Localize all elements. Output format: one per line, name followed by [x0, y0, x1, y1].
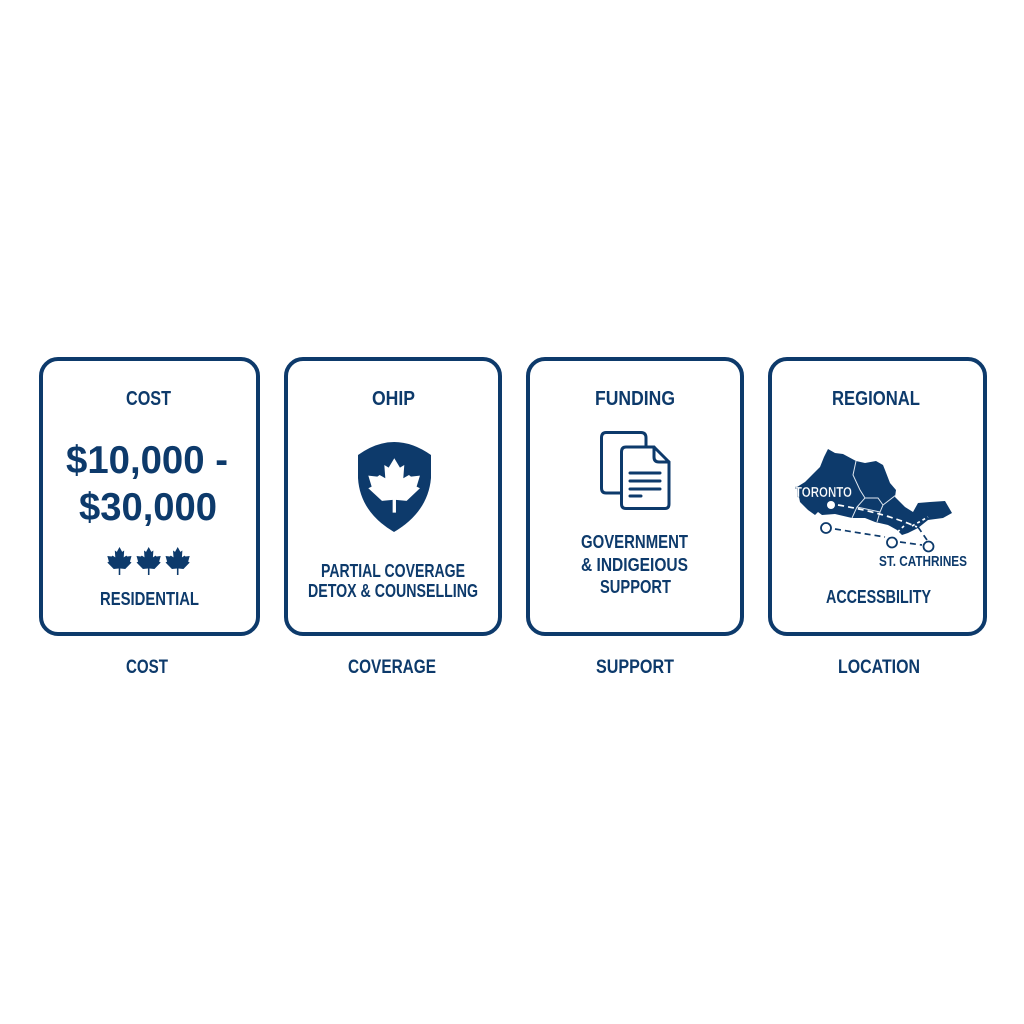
text: coverage description: DETOX & COUNSELLING — [308, 581, 478, 601]
card frame: funding — [528, 359, 742, 634]
price range: $30,000 — [79, 486, 217, 529]
text: support description: SUPPORT — [600, 577, 671, 597]
label: St. Cathrines: ST. CATHRINES — [879, 553, 967, 570]
heading: cost: COST — [126, 388, 171, 410]
label: residential: RESIDENTIAL — [100, 589, 199, 609]
text: support description: & INDIGEIOUS — [581, 555, 688, 575]
heading: funding: FUNDING — [595, 388, 675, 410]
map: southern Ontario — [797, 449, 952, 552]
icon: shield with maple leaf — [358, 442, 431, 532]
label: accessibility: ACCESSBILITY — [826, 587, 931, 607]
caption: support: SUPPORT — [596, 657, 674, 678]
card frame: ohip — [286, 359, 500, 634]
panel: cost — [41, 359, 258, 634]
text: support description: GOVERNMENT — [581, 532, 688, 552]
text: coverage description: PARTIAL COVERAGE — [321, 561, 465, 581]
caption: cost: COST — [126, 657, 168, 678]
card frame: regional — [770, 359, 985, 634]
icon: three maple leaves — [107, 547, 190, 575]
caption: coverage: COVERAGE — [348, 657, 436, 678]
panel: ohip — [286, 359, 500, 634]
caption: location: LOCATION — [838, 657, 920, 678]
label: Toronto: TORONTO — [795, 485, 852, 501]
markers: route stops — [821, 523, 934, 552]
price range — [66, 439, 228, 529]
heading: regional: REGIONAL — [832, 388, 920, 410]
card frame: cost — [41, 359, 258, 634]
panel: funding — [528, 359, 742, 634]
icon: documents — [602, 432, 669, 508]
marker: Toronto — [827, 501, 835, 509]
heading: ohip: OHIP — [372, 388, 415, 410]
text: coverage description — [308, 561, 478, 601]
text: support description — [581, 532, 688, 597]
price range: $10,000 - — [66, 439, 228, 482]
region borders — [852, 461, 896, 522]
route: dashed lines — [835, 505, 928, 545]
panel: regional — [770, 359, 985, 634]
